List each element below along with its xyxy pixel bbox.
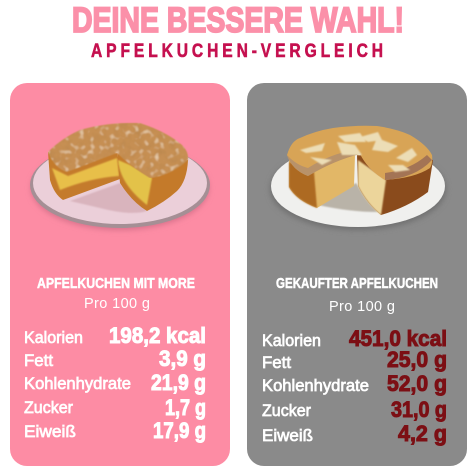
nutrition table: 31,0 g	[391, 397, 447, 422]
nutrition table: 4,2 g	[398, 421, 447, 446]
image: glazed apple cake on plate	[270, 126, 446, 230]
image: crumble apple cake on plate	[30, 123, 210, 230]
nutrition table	[262, 326, 447, 446]
nutrition table: Kalorien	[262, 331, 321, 350]
nutrition table: 25,0 g	[387, 347, 447, 372]
nutrition table: Fett	[262, 353, 291, 372]
heading: GEKAUFTER APFELKUCHEN	[276, 276, 438, 292]
text: per 100 g: Pro 100 g	[329, 299, 395, 315]
panel: Apfelkuchen mit More	[10, 83, 230, 466]
nutrition table: 198,2 kcal	[109, 323, 206, 348]
nutrition table: 1,7 g	[165, 395, 206, 420]
nutrition table: 451,0 kcal	[349, 326, 447, 351]
nutrition table	[24, 323, 206, 443]
nutrition table: Zucker	[262, 401, 311, 420]
panel: gekaufter Apfelkuchen	[247, 83, 467, 466]
title: DEINE BESSERE WAHL!	[72, 1, 404, 40]
nutrition table: Kohlenhydrate	[262, 376, 369, 395]
text: per 100 g: Pro 100 g	[84, 296, 150, 312]
nutrition table: Fett	[24, 351, 53, 370]
heading: APFELKUCHEN MIT MORE	[37, 276, 195, 292]
nutrition table: 3,9 g	[159, 346, 206, 371]
subtitle: APFELKUCHEN-VERGLEICH	[91, 39, 383, 61]
nutrition table: Zucker	[24, 398, 73, 417]
nutrition table: Kalorien	[24, 328, 83, 347]
nutrition table: Eiweiß	[262, 426, 313, 445]
nutrition table: Kohlenhydrate	[24, 374, 131, 393]
nutrition table: 17,9 g	[153, 418, 206, 443]
nutrition table: Eiweiß	[24, 422, 76, 441]
nutrition table: 21,9 g	[151, 370, 206, 395]
apple slices	[300, 132, 417, 172]
nutrition table: 52,0 g	[387, 371, 447, 396]
